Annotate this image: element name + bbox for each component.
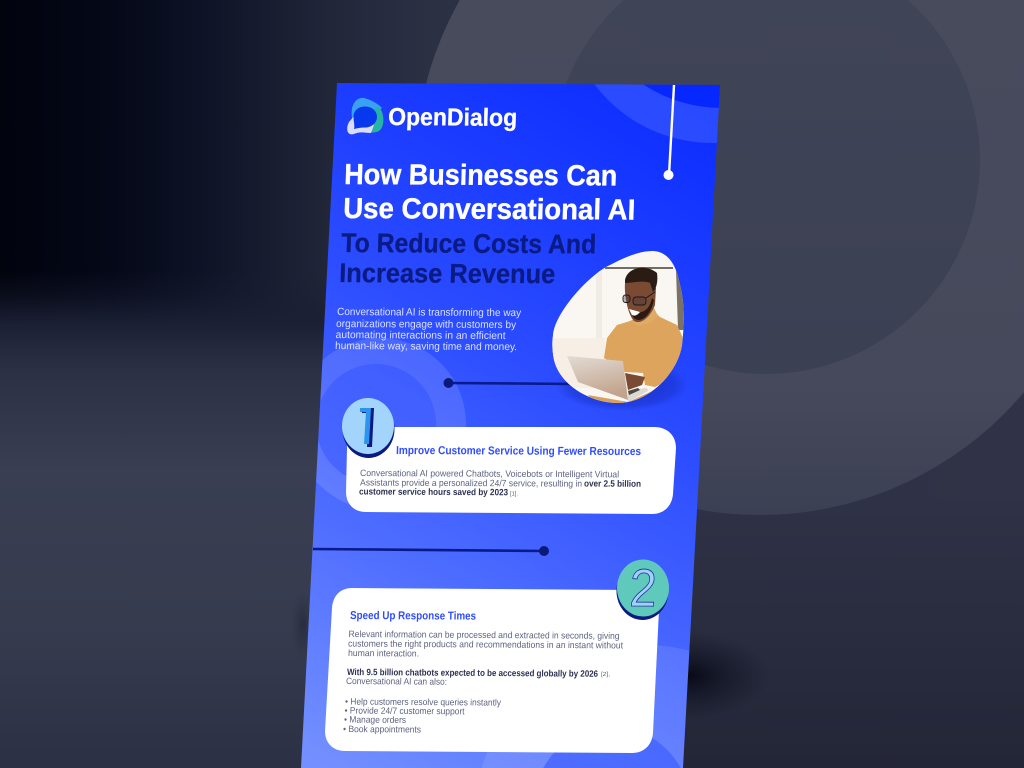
bullet list: • Help customers resolve queries instantly: [345, 697, 502, 708]
card 1 body: Assistants provide a personalized 24/7 service, resulting in: [360, 478, 582, 489]
panel: infographic sheet: [301, 83, 720, 768]
connector: dark line to card 2: [313, 546, 549, 556]
connector: white line with dot: [664, 85, 674, 180]
photo shadow: [556, 359, 688, 411]
card 1 body: Conversational AI powered Chatbots, Voicebots or Intelligent Virtual: [360, 468, 619, 479]
title: How Businesses Can: [344, 159, 618, 192]
bullet list: • Provide 24/7 customer support: [344, 706, 465, 716]
card 1 body: [1].: [510, 492, 518, 498]
card 1 body: over 2.5 billion: [584, 479, 642, 489]
icon: chat bubbles: [347, 98, 383, 134]
card 2 body: Conversational AI can also:: [346, 676, 447, 687]
card 2 body: human interaction.: [348, 648, 419, 658]
wordmark: OpenDialog: [388, 104, 518, 132]
intro paragraph: [335, 306, 522, 353]
card 2 body: With 9.5 billion chatbots expected to be accessed globally by 2026: [347, 667, 598, 679]
connector: dark line to photo: [444, 378, 580, 388]
intro paragraph: organizations engage with customers by: [336, 318, 517, 331]
title: [339, 159, 636, 289]
card 1 body: [359, 468, 642, 498]
logo: [347, 98, 518, 134]
card 2 body: [2],: [601, 672, 610, 678]
intro paragraph: human-like way, saving time and money.: [335, 340, 517, 353]
card 2 heading: Speed Up Response Times: [350, 610, 476, 623]
title: Increase Revenue: [339, 258, 556, 289]
card 2: speed up response times: [325, 559, 669, 753]
card 2 body: Relevant information can be processed and extracted in seconds, giving: [348, 629, 620, 641]
title: Use Conversational AI: [343, 193, 636, 227]
intro paragraph: automating interactions in an efficient: [335, 329, 506, 342]
badge 2: [616, 559, 669, 620]
decorative circles: [316, 84, 720, 768]
title: To Reduce Costs And: [341, 228, 597, 259]
card 1: improve customer service: [342, 398, 676, 514]
card 2 body: customers the right products and recommendations in an instant without: [348, 639, 624, 650]
card 1 heading: Improve Customer Service Using Fewer Resources: [396, 445, 641, 458]
bullet list: [343, 697, 502, 735]
bullet list: • Manage orders: [344, 715, 407, 725]
badge 2: 2: [629, 559, 658, 618]
intro paragraph: Conversational AI is transforming the way: [337, 306, 522, 319]
badge 1: [342, 398, 394, 458]
card 2 body: [346, 629, 624, 687]
photo: man at laptop: [552, 251, 684, 403]
bullet list: • Book appointments: [343, 724, 422, 735]
card 1 body: customer service hours saved by 2023: [359, 487, 508, 497]
